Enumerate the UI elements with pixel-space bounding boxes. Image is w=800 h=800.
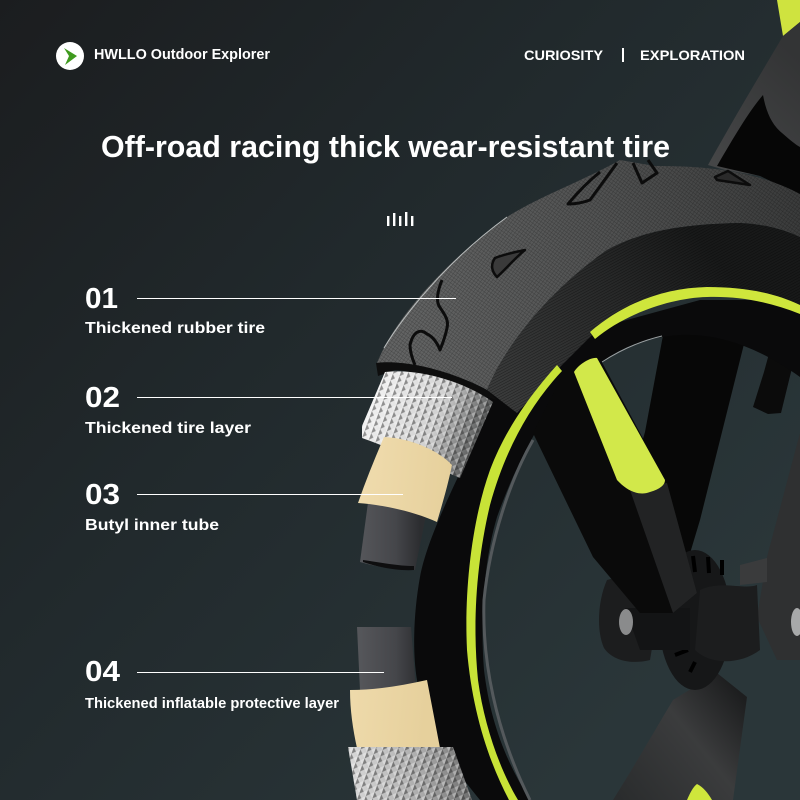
callout 01: 01 <box>85 283 118 315</box>
tread lug: triangle <box>492 250 525 277</box>
exploded upper: tan layer <box>358 437 452 522</box>
callout 01: Thickened rubber tire <box>85 320 265 337</box>
exploded upper: silver layer <box>362 371 493 478</box>
callout 02 <box>85 382 452 437</box>
icon: sound bars <box>387 212 413 226</box>
callout 01 <box>85 283 456 337</box>
lime lower insert <box>687 784 712 800</box>
lime rim stripe: top arc <box>590 287 800 339</box>
lime rim stripe: side arc <box>466 365 562 800</box>
tire end lip <box>376 362 497 400</box>
hub cylinder <box>695 558 800 661</box>
tire sidewall <box>487 223 800 413</box>
exploded lower: tan layer <box>350 680 440 748</box>
callout 03: Butyl inner tube <box>85 517 219 534</box>
header tag: curiosity: CURIOSITY <box>524 47 604 63</box>
callout 03 <box>85 479 403 534</box>
hub disc <box>619 550 731 690</box>
exploded lower: silver layer <box>348 747 472 800</box>
left hub pad <box>599 575 660 662</box>
chrome bolt left <box>619 609 633 635</box>
brand name: HWLLO Outdoor Explorer <box>94 47 270 63</box>
tread edge highlight <box>384 217 507 348</box>
header tag: exploration: EXPLORATION <box>640 47 745 63</box>
tread lug: squiggle <box>410 280 448 365</box>
exploded upper: inner tube <box>360 495 428 570</box>
tire tread <box>377 160 800 390</box>
lime spoke insert <box>574 358 665 494</box>
front spoke blade <box>533 353 697 613</box>
callout 02: 02 <box>85 382 120 414</box>
valve <box>753 350 792 414</box>
callout 02: Thickened tire layer <box>85 420 251 437</box>
callout 04: Thickened inflatable protective layer <box>85 696 339 712</box>
tread lug: top <box>568 160 657 204</box>
tread lug: right <box>715 171 750 185</box>
rim opening highlight <box>602 336 662 362</box>
lower spoke <box>613 673 747 800</box>
callout 04 <box>85 656 384 712</box>
brand logo <box>56 42 84 70</box>
chrome bolt right <box>791 608 800 636</box>
upper fork <box>708 0 800 195</box>
right fork leg <box>757 433 800 660</box>
rear fork bar <box>620 330 745 570</box>
exploded lower: inner tube <box>357 627 416 690</box>
title: Off-road racing thick wear-resistant tire <box>101 130 670 164</box>
wheel rim ring <box>414 300 800 800</box>
callout 04: 04 <box>85 656 120 688</box>
header divider <box>622 48 624 62</box>
callout 03: 03 <box>85 479 120 511</box>
rim inner grey edge <box>484 440 533 800</box>
